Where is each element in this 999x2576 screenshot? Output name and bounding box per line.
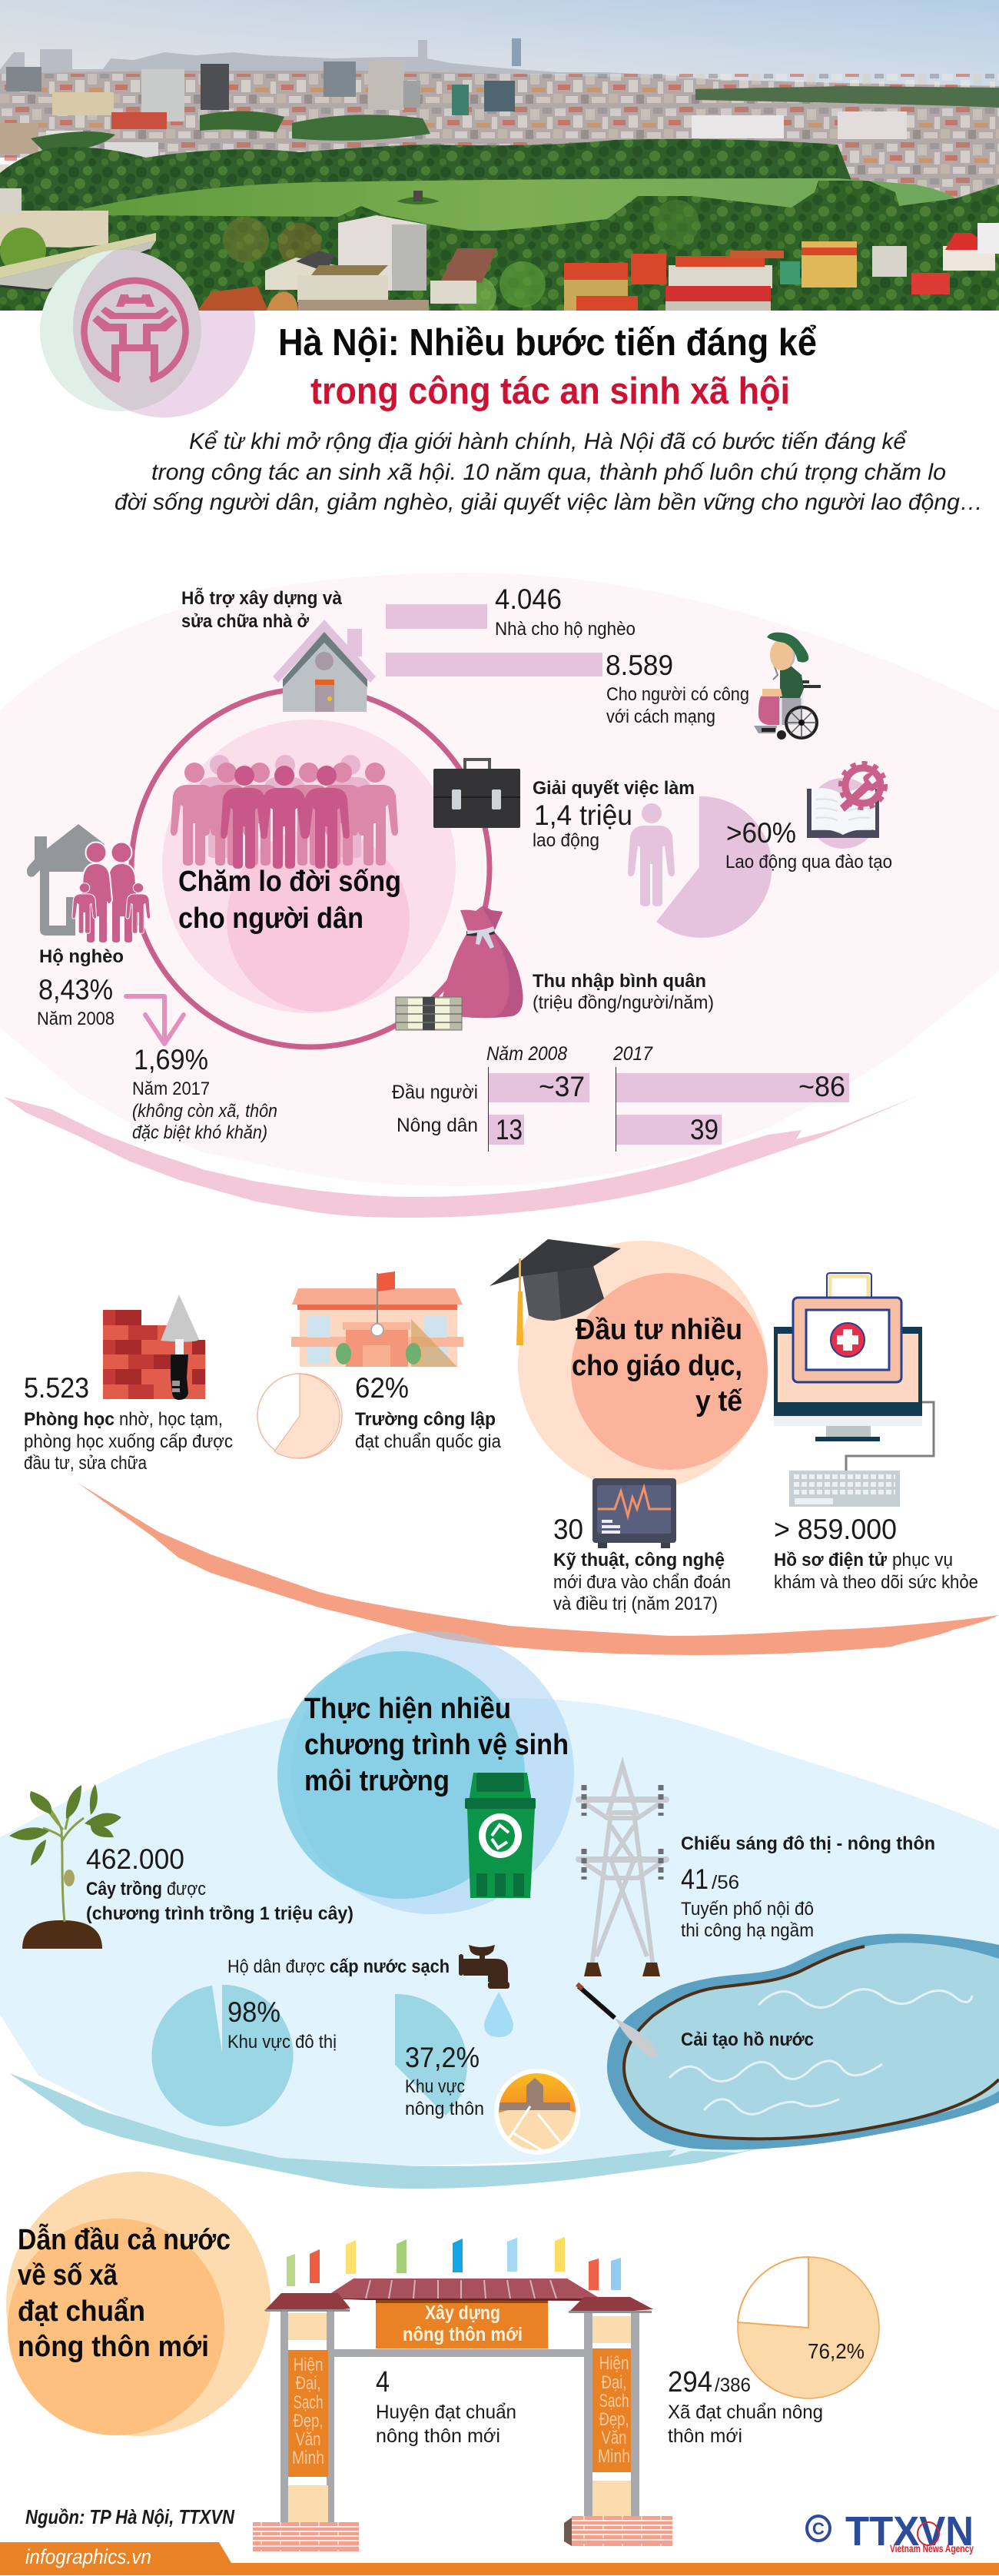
text: jobs: 1,4 triệu — [534, 799, 632, 831]
icon: brick wall and trowel — [103, 1295, 205, 1400]
text: housing support heading: sửa chữa nhà ở — [181, 611, 310, 632]
text: urban lighting — [681, 1833, 935, 1941]
gate sign: nông thôn mới — [403, 2324, 523, 2345]
flags — [287, 2237, 621, 2290]
text: poverty rate 2017: Năm 2017 — [132, 1079, 210, 1099]
text: communes — [668, 2366, 823, 2447]
footer band: infographics.vn — [25, 2545, 151, 2568]
brick bases — [253, 2516, 672, 2551]
text: electronic records: phục vụ — [892, 1550, 953, 1571]
text: trees planted: 462.000 — [86, 1843, 184, 1875]
left pillar: Đại, — [295, 2373, 321, 2394]
left pillar: Đẹp, — [294, 2411, 323, 2431]
bar chart: income: ~37 — [539, 1071, 585, 1102]
text: clean water: cấp nước sạch — [330, 1956, 450, 1977]
bar chart: houses built: với cách mạng — [606, 706, 715, 727]
heading: environmental sanitation — [304, 1693, 569, 1797]
icon: power tower — [576, 1765, 669, 1976]
text: trees planted: được — [167, 1879, 206, 1900]
text: trees planted — [86, 1843, 353, 1924]
text: urban share: 98% — [227, 1996, 280, 2028]
panel: central circle — [131, 689, 490, 1047]
text: classrooms: 5.523 — [24, 1372, 89, 1404]
right pillar: Đẹp, — [599, 2409, 629, 2430]
title — [278, 322, 817, 412]
heading: leading the country: Dẫn đầu cả nước — [18, 2222, 231, 2256]
icon: keyboard — [789, 1471, 900, 1507]
text: trained share — [725, 817, 892, 873]
logo of Hanoi with overlapping circles — [40, 250, 201, 411]
brush stroke: blue divider — [9, 2073, 771, 2189]
bar chart: houses built: Cho người có công — [606, 684, 749, 705]
text: technology: mới đưa vào chẩn đoán — [553, 1572, 731, 1593]
gate beam — [334, 2349, 586, 2357]
text: communes: thôn mới — [668, 2425, 742, 2447]
text: technology: 30 — [553, 1514, 583, 1545]
text: jobs: Giải quyết việc làm — [533, 778, 695, 799]
text: rural share — [405, 2042, 484, 2119]
panel: people's lives background — [0, 573, 999, 1218]
text: average income: Thu nhập bình quân — [533, 971, 706, 992]
text: classrooms: nhờ, học tạm, — [119, 1409, 223, 1430]
right pillar: Sạch — [599, 2391, 629, 2411]
source: Nguồn: TP Hà Nội, TTXVN — [25, 2505, 235, 2528]
bar chart: income — [392, 1043, 849, 1152]
text: urban lighting: 41 — [681, 1863, 709, 1895]
pie chart: 98% urban households — [152, 1985, 294, 2126]
text: communes: Xã đạt chuẩn nông — [668, 2401, 823, 2423]
text: housing support heading: Hỗ trợ xây dựng và — [181, 587, 343, 609]
text: poverty rate: Hộ nghèo — [39, 946, 124, 967]
text: urban lighting: Tuyến phố nội đô — [681, 1899, 814, 1920]
heading: leading the country: nông thôn mới — [18, 2331, 209, 2363]
panel: new rural circles — [6, 2172, 270, 2436]
logo: TTXVN: C — [812, 2519, 825, 2538]
heading: invest in education and health — [572, 1314, 743, 1418]
text: poverty rate 2017: 1,69% — [134, 1044, 208, 1075]
intro paragraph: đời sống người dân, giảm nghèo, giải quyết việc làm bền vững cho người lao động… — [115, 490, 983, 515]
text: rural share: Khu vực — [405, 2076, 465, 2097]
heading: leading the country: đạt chuẩn — [18, 2295, 145, 2328]
text: urban lighting: Chiếu sáng đô thị - nông thôn — [681, 1833, 935, 1854]
right pillar: Minh — [598, 2446, 630, 2467]
bar chart: income: 39 — [690, 1114, 719, 1145]
icon: recycling bin — [465, 1773, 536, 1898]
icon: book and gear — [807, 763, 885, 849]
text: rural share: 37,2% — [405, 2042, 480, 2073]
arrow: poverty falling — [126, 996, 184, 1044]
heading: care for people's lives: Chăm lo đời sống — [178, 866, 401, 898]
logo: TTXVN: TTXVN — [845, 2508, 974, 2554]
bar chart: houses built: 4.046 — [495, 583, 562, 615]
text: electronic records: khám và theo dõi sức khỏe — [774, 1572, 978, 1593]
text: jobs: lao động — [533, 830, 599, 851]
left pillar: Sạch — [294, 2392, 323, 2413]
bar chart: houses built: Nhà cho hộ nghèo — [495, 619, 636, 640]
text: poverty rate 2017: đặc biệt khó khăn) — [132, 1122, 267, 1143]
icon: banknotes — [396, 997, 462, 1030]
text: districts — [376, 2366, 516, 2447]
text: urban share: Khu vực đô thị — [227, 2032, 337, 2052]
heading: leading the country: về số xã — [18, 2259, 118, 2292]
heading: environmental sanitation: chương trình vệ sinh — [304, 1729, 569, 1761]
footer band — [0, 2542, 999, 2575]
text: classrooms — [24, 1372, 233, 1474]
text: communes: /386 — [715, 2375, 751, 2396]
panel: education and health circles — [518, 1241, 768, 1490]
text: poverty rate 2017 — [132, 1044, 277, 1143]
text: classrooms: Phòng học — [24, 1409, 115, 1430]
illustration: village gate — [253, 2237, 672, 2551]
text: districts: nông thôn mới — [376, 2425, 500, 2447]
left pillar: Hiện — [294, 2355, 323, 2375]
left pillar — [280, 2311, 334, 2522]
text: trees planted: Cây trồng — [86, 1879, 162, 1900]
text: districts: Huyện đạt chuẩn — [376, 2401, 516, 2423]
icon: graduation cap — [490, 1239, 621, 1345]
pie chart: 37.2% rural households — [395, 1994, 467, 2116]
icon: village badge — [494, 2069, 580, 2155]
right pillar — [584, 2312, 639, 2517]
bar chart: income: Năm 2008 — [486, 1043, 567, 1065]
text: schools: đạt chuẩn quốc gia — [355, 1431, 502, 1452]
icon: briefcase — [433, 760, 520, 828]
header photo: Hanoi skyline and Hoan Kiem lake — [0, 0, 999, 316]
text: poverty rate: 8,43% — [38, 974, 113, 1005]
gate sign: Xây dựng — [425, 2302, 500, 2324]
text: rural share: nông thôn — [405, 2099, 484, 2119]
pie chart: 62% — [257, 1374, 342, 1458]
text: trained share: Lao động qua đào tạo — [725, 852, 892, 873]
intro paragraph — [115, 429, 983, 515]
text: jobs — [533, 778, 695, 851]
heading: invest in education and health: cho giáo dục, — [572, 1350, 742, 1382]
logo backing circle: pink — [73, 235, 255, 417]
text: communes: 294 — [668, 2366, 712, 2398]
icon: shovel — [577, 1984, 658, 2058]
text: districts: 4 — [376, 2366, 390, 2398]
text: schools: 62% — [355, 1372, 409, 1404]
icon: tree seedling — [9, 1784, 121, 1949]
left pillar: Văn — [295, 2429, 321, 2450]
text: urban lighting: thi công hạ ngầm — [681, 1920, 814, 1941]
text: electronic records: > 859.000 — [774, 1514, 897, 1545]
roofs — [264, 2279, 653, 2313]
icon: crowd of people — [171, 755, 398, 869]
pie chart: trained workers — [656, 796, 772, 938]
text: clean water: Hộ dân được — [227, 1956, 325, 1977]
text: schools — [355, 1372, 502, 1452]
text: trees planted: (chương trình trồng 1 triệu cây) — [86, 1903, 353, 1924]
text: classrooms: đầu tư, sửa chữa — [24, 1453, 148, 1474]
heading: leading the country — [18, 2222, 231, 2363]
text: poverty rate: Năm 2008 — [37, 1009, 115, 1029]
pie chart: 76.2% communes — [738, 2257, 879, 2398]
panel: environment background — [0, 1698, 999, 2189]
bar chart: income: ~86 — [798, 1071, 845, 1102]
text: technology: Kỹ thuật, công nghệ — [553, 1550, 725, 1571]
title: Hà Nội: Nhiều bước tiến đáng kể — [278, 322, 817, 364]
panel: environment circles — [277, 1631, 574, 1914]
title: trong công tác an sinh xã hội — [310, 371, 790, 412]
text: electronic records: Hồ sơ điện tử — [774, 1550, 888, 1571]
left pillar: Minh — [292, 2448, 324, 2468]
text: poverty rate 2017: (không còn xã, thôn — [132, 1101, 277, 1122]
right pillar: Hiện — [599, 2353, 629, 2374]
text: urban share — [227, 1996, 337, 2052]
intro paragraph: trong công tác an sinh xã hội. 10 năm qua, thành phố luôn chú trọng chăm lo — [151, 460, 946, 485]
text: poverty rate — [37, 946, 124, 1029]
text: technology — [553, 1514, 731, 1614]
heading: environmental sanitation: môi trường — [304, 1765, 450, 1797]
text: schools: Trường công lập — [355, 1409, 496, 1430]
illustration: lake renovation — [577, 1933, 999, 2149]
text: average income: (triệu đồng/người/năm) — [533, 992, 714, 1013]
bar chart: income: Đầu người — [392, 1082, 478, 1103]
right pillar: Văn — [601, 2428, 627, 2448]
right pillar: Đại, — [601, 2372, 627, 2393]
bar chart: houses built — [386, 583, 749, 727]
logo ring and gate emblem — [85, 281, 186, 382]
icon: tap and water drop — [459, 1945, 513, 2037]
brush stroke: pink divider — [4, 1095, 921, 1218]
illustration: lake renovation: Cải tạo hồ nước — [681, 2029, 814, 2050]
icon: heart rate machine — [592, 1478, 676, 1548]
bar chart: income: Nông dân — [397, 1115, 478, 1136]
heading: invest in education and health: Đầu tư nhiều — [576, 1314, 742, 1346]
icon: worker — [628, 803, 675, 906]
text: average income — [533, 971, 714, 1013]
icon: school building — [291, 1271, 463, 1367]
intro paragraph: Kể từ khi mở rộng địa giới hành chính, Hà Nội đã có bước tiến đáng kể — [189, 429, 907, 454]
heading: care for people's lives — [178, 866, 401, 935]
icon: money bag — [440, 906, 523, 1018]
icon: house — [273, 620, 376, 712]
icon: computer with medical bag — [774, 1273, 934, 1507]
heading: invest in education and health: y tế — [695, 1385, 743, 1418]
heading: environmental sanitation: Thực hiện nhiều — [304, 1693, 511, 1725]
text: technology: và điều trị (năm 2017) — [553, 1594, 718, 1614]
text: urban lighting: /56 — [712, 1872, 739, 1893]
text: electronic records — [774, 1514, 978, 1593]
gate sign — [376, 2297, 548, 2348]
bar chart: income: 2017 — [612, 1043, 653, 1065]
text: clean water — [227, 1956, 450, 1977]
text: housing support heading — [181, 587, 343, 632]
pie chart: 76.2% communes: 76,2% — [808, 2339, 865, 2363]
icon: poor household — [27, 824, 151, 943]
bar chart: houses built: 8.589 — [606, 650, 673, 681]
text: classrooms: phòng học xuống cấp được — [24, 1431, 233, 1452]
heading: care for people's lives: cho người dân — [178, 902, 363, 935]
bar chart: income: 13 — [496, 1114, 523, 1145]
icon: veteran in wheelchair — [754, 633, 821, 740]
brush stroke: orange divider — [78, 1483, 999, 1655]
text: trained share: >60% — [726, 817, 796, 849]
